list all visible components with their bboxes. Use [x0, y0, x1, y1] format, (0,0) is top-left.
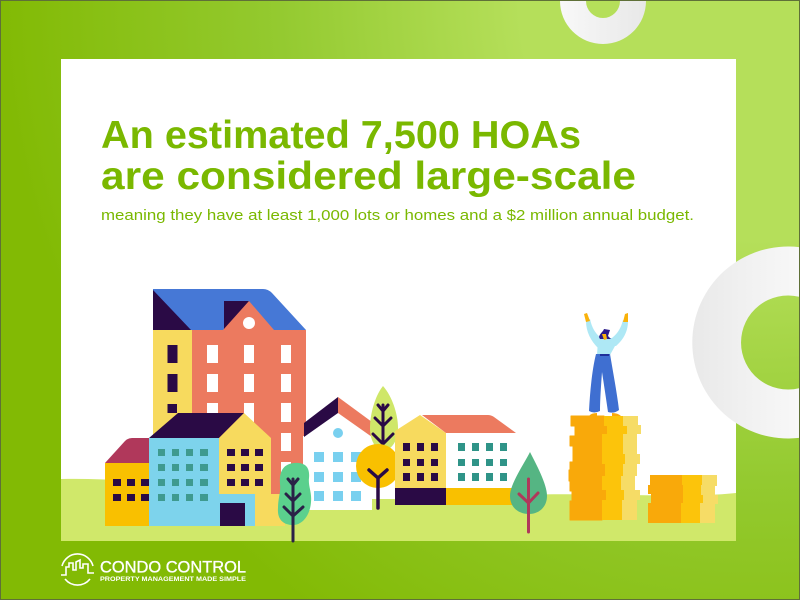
coin stack: short	[648, 475, 718, 523]
white house	[304, 397, 372, 510]
decorative ring: right	[692, 247, 799, 438]
ground hills	[61, 479, 736, 541]
subtitle: meaning they have at least 1,000 lots or homes and a $2 million annual budget.	[101, 207, 694, 224]
icon: logo skyline	[61, 554, 94, 585]
icon: green tree	[278, 463, 311, 541]
tall building	[153, 289, 306, 495]
wordmark: CONDO CONTROL	[100, 558, 246, 576]
front building group	[105, 404, 285, 526]
decorative ring: top	[560, 1, 646, 44]
panel: white card	[61, 59, 736, 541]
tagline: PROPERTY MANAGEMENT MADE SIMPLE	[100, 576, 247, 583]
icon: pale pointed tree	[370, 386, 398, 450]
icon: teal teardrop tree	[510, 452, 547, 532]
icon: orange round tree	[356, 444, 400, 508]
title	[101, 114, 636, 198]
title: An estimated 7,500 HOAs	[101, 114, 581, 157]
coin stack: tall	[569, 416, 641, 520]
logo: Condo Control	[61, 554, 247, 585]
right house	[395, 415, 521, 505]
title: are considered large-scale	[101, 155, 636, 198]
figure: person with raised arms	[584, 313, 628, 416]
